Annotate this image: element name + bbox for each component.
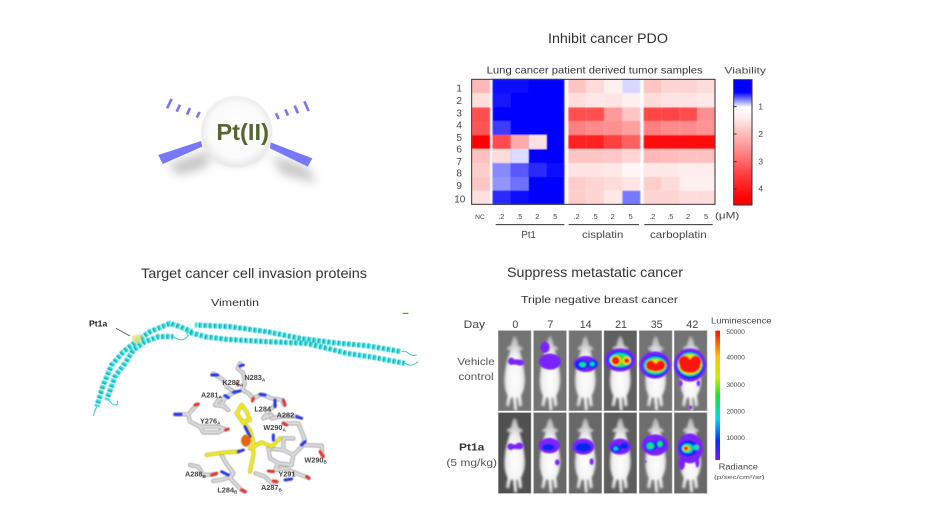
residue labels: Y276 <box>200 416 217 425</box>
row labels: 8 <box>456 169 462 180</box>
ribbon helices <box>97 323 405 407</box>
luminescence scale bar: 40000 <box>726 355 745 362</box>
group labels <box>521 230 707 241</box>
residue labels: Y291 <box>278 470 295 479</box>
row labels: 5 <box>456 133 462 144</box>
residue labels: A282 <box>277 410 294 419</box>
day labels: 0 <box>512 319 518 331</box>
residue labels: B <box>234 490 238 495</box>
Pt1a binding site <box>132 334 142 343</box>
concentration labels: .2 <box>649 212 655 221</box>
row labels: (5 mg/kg) <box>446 458 497 469</box>
concentration labels: NC <box>475 214 485 221</box>
residue labels: A <box>217 421 221 426</box>
residue labels: L284 <box>254 405 272 414</box>
day labels: 35 <box>651 319 663 331</box>
concentration labels: 2 <box>611 212 615 221</box>
panel: Pt(II) complex <box>158 96 317 183</box>
luminescence scale bar: (p/sec/cm²/sr) <box>714 475 765 481</box>
luminescence scale bar: Radiance <box>719 462 759 471</box>
group labels: Pt1 <box>521 230 536 241</box>
colour scale: Viability <box>724 66 766 76</box>
concentration labels <box>475 212 708 221</box>
colour scale: 2 <box>758 129 763 139</box>
residue labels: A281 <box>201 390 219 399</box>
title: Target cancer cell invasion proteins: Target cancer cell invasion proteins <box>141 265 367 281</box>
concentration labels: 2 <box>535 212 539 221</box>
helix tails <box>93 335 418 416</box>
row labels: 9 <box>456 181 462 192</box>
image panels <box>498 331 707 493</box>
residue labels: W290 <box>263 423 282 432</box>
luminescence scale bar: 30000 <box>726 382 745 389</box>
concentration labels: .5 <box>667 212 673 221</box>
day labels: 14 <box>580 319 592 331</box>
panel: vimentin ribbon <box>89 313 418 416</box>
concentration labels: .2 <box>574 212 580 221</box>
day labels: 21 <box>615 319 627 331</box>
subtitle: Triple negative breast cancer: Triple negative breast cancer <box>521 294 679 306</box>
small green fragment <box>403 312 408 315</box>
row labels <box>446 357 497 469</box>
subtitle: Lung cancer patient derived tumor samples <box>487 65 703 76</box>
heatmap grid <box>472 79 715 204</box>
residue labels <box>185 373 327 495</box>
panel: binding site detail <box>175 363 327 495</box>
row labels: Pt1a <box>459 443 485 454</box>
label: Pt(II): Pt(II) <box>216 119 269 145</box>
row labels: 10 <box>454 194 466 205</box>
title: Inhibit cancer PDO: Inhibit cancer PDO <box>548 30 668 46</box>
day labels: 42 <box>686 319 698 331</box>
panel: mouse imaging <box>446 317 772 493</box>
title: Suppress metastatic cancer: Suppress metastatic cancer <box>507 264 683 280</box>
row labels: control <box>458 372 494 383</box>
residue labels: W290 <box>304 455 323 464</box>
concentration labels: 5 <box>704 212 708 221</box>
weak ligand dashes <box>167 99 309 119</box>
row labels: 1 <box>456 84 462 95</box>
row labels: 4 <box>456 120 462 131</box>
Pt1a leader line <box>116 328 130 336</box>
concentration labels: 5 <box>629 212 633 221</box>
row labels: Vehicle <box>457 357 495 368</box>
colour scale: 4 <box>758 184 763 194</box>
platinum atom <box>241 435 251 447</box>
residue labels: K282 <box>222 378 240 387</box>
colour scale <box>724 66 766 205</box>
concentration labels: .2 <box>498 212 504 221</box>
day labels <box>464 319 698 331</box>
mice <box>504 336 701 493</box>
luminescence scale bar <box>711 317 772 481</box>
luminescence scale bar: 20000 <box>726 409 745 416</box>
residue labels: A287 <box>261 483 279 492</box>
group labels: cisplatin <box>582 230 623 241</box>
concentration labels: .5 <box>592 212 598 221</box>
concentration labels: .5 <box>516 212 522 221</box>
yellow ligand sticks <box>207 405 280 472</box>
sphere <box>201 96 272 167</box>
residue labels: B <box>279 487 283 492</box>
concentration labels: 5 <box>553 212 557 221</box>
luminescence signals <box>507 342 706 470</box>
panel: heatmap <box>454 65 766 241</box>
heteroatom sticks <box>175 365 323 492</box>
subtitle: Vimentin: Vimentin <box>211 297 259 309</box>
row labels <box>454 84 466 205</box>
residue labels: A <box>282 427 286 432</box>
strong ligand wedges <box>158 141 312 167</box>
day labels: 7 <box>547 319 553 331</box>
residue labels: B <box>323 460 327 465</box>
residue labels: A <box>219 395 223 400</box>
Pt1a label: Pt1a <box>89 319 107 329</box>
colour scale: 1 <box>758 102 763 112</box>
concentration labels: 2 <box>686 212 690 221</box>
residue labels: A <box>240 382 244 387</box>
day labels: Day <box>464 319 486 331</box>
row labels: 7 <box>456 157 462 168</box>
heatmap frame <box>472 79 715 204</box>
unit label: (μM) <box>715 210 739 220</box>
residue labels: L284 <box>217 485 234 494</box>
row labels: 3 <box>456 108 462 119</box>
luminescence scale bar: Luminescence <box>711 317 772 326</box>
residue sticks <box>175 363 322 492</box>
residue labels: A288 <box>185 470 203 479</box>
row labels: 2 <box>456 96 462 107</box>
luminescence scale bar: 10000 <box>726 435 745 442</box>
luminescence scale bar: 50000 <box>726 329 745 336</box>
residue labels: B <box>203 474 207 479</box>
residue labels: N283 <box>244 373 262 382</box>
colour scale: 3 <box>758 157 763 167</box>
residue labels: A <box>262 377 266 382</box>
group brackets <box>496 223 713 226</box>
ligand and sphere shadows <box>167 132 317 183</box>
group labels: carboplatin <box>650 230 707 241</box>
row labels: 6 <box>456 145 462 156</box>
